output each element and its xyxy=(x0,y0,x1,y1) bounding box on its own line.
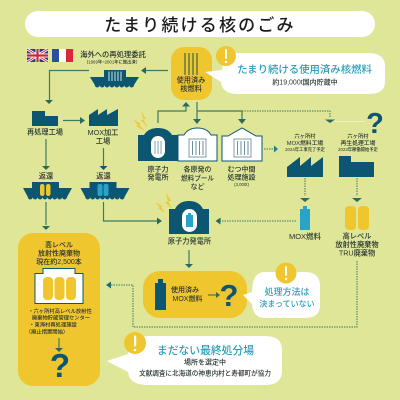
icon: France flag xyxy=(52,49,73,62)
overseas reprocessing label: 海外への再処理委託 xyxy=(80,50,147,59)
panel: high-level radioactive waste xyxy=(18,233,100,386)
arrow: dotted MOX fuel to power plant xyxy=(216,218,296,224)
panel: spent MOX fuel: MOX燃料 xyxy=(173,294,202,303)
icon: TRU waste capsules xyxy=(345,206,369,230)
title: たまり続ける核のごみ xyxy=(104,16,296,35)
icon: MOX fuel xyxy=(300,206,310,230)
panel: high-level radioactive waste: （廃止措置開始） xyxy=(26,328,68,336)
icon: MOX fabrication plant xyxy=(88,109,118,146)
label: TRU waste xyxy=(335,232,379,258)
arrow: to unknown xyxy=(58,338,60,348)
icon: on-site fuel pool xyxy=(178,128,217,191)
label: Rokkasho reprocessing plant: 六ヶ所村 xyxy=(347,132,369,140)
arrow: dotted to undecided xyxy=(242,111,365,123)
arrow: MOX ship to power plant xyxy=(104,202,162,224)
icon: MOX fabrication plant: 工場 xyxy=(96,136,110,146)
icon: Mutsu interim storage xyxy=(222,128,262,187)
icon: power plant with MOX xyxy=(169,201,209,234)
arrow: reprocessing to return ship xyxy=(42,139,50,170)
overseas reprocessing label: （1969年~2001年に搬出済） xyxy=(84,58,140,66)
arrow: fuel to overseas ship xyxy=(141,67,168,74)
arrow: MOX plant to return ship xyxy=(100,148,108,170)
icon: nuclear power plant xyxy=(138,128,178,182)
label: TRU waste: 放射性廃棄物 xyxy=(335,240,379,249)
icon: Mutsu interim storage: 処理施設 xyxy=(228,172,256,182)
icon: Rokkasho reprocessing plant xyxy=(339,156,374,177)
arrow: fuel to storage xyxy=(193,102,246,124)
label: MOX fuel: MOX燃料 xyxy=(289,231,322,241)
icon: overseas ship xyxy=(90,70,139,87)
icon: MOX fabrication plant: MOX加工 xyxy=(88,128,118,137)
icon: nuclear power plant: 発電所 xyxy=(148,172,168,182)
arrow: fuel to power plant xyxy=(158,102,190,123)
arrow: plant to spent MOX xyxy=(185,250,193,268)
panel: high-level radioactive waste: 高レベル xyxy=(45,240,73,249)
panel: spent nuclear fuel: 使用済み xyxy=(177,76,205,84)
panel: high-level radioactive waste: ・東海村再処理施設 xyxy=(29,320,78,328)
arrow: reprocessing to MOX plant xyxy=(63,117,85,124)
question mark: ? xyxy=(366,108,384,140)
icon: return ship with MOX xyxy=(80,182,130,199)
arrow: dotted to TRU waste xyxy=(352,178,362,202)
callout: no final disposal site xyxy=(107,332,282,385)
icon: reprocessing plant: 再処理工場 xyxy=(27,128,63,136)
label: return: 返還 xyxy=(96,172,111,180)
icon: nuclear power plant: 原子力 xyxy=(148,164,168,174)
label: Rokkasho MOX plant: 2024年工事完了予定 xyxy=(285,146,326,153)
panel: high-level radioactive waste: ・六ヶ所村高レベル放射性 xyxy=(28,307,92,315)
arrow: dotted to MOX fuel xyxy=(300,178,310,202)
overseas reprocessing label xyxy=(80,50,147,66)
icon: on-site fuel pool: 燃料プール xyxy=(181,174,214,182)
icon: waste cask xyxy=(35,268,83,304)
icon: return ship with waste xyxy=(23,182,72,199)
arrow xyxy=(208,294,216,296)
arrow: ship to high-level waste xyxy=(42,202,50,230)
label: Rokkasho MOX plant: 六ヶ所村 xyxy=(294,132,316,140)
panel: spent MOX fuel: 使用済み xyxy=(171,285,199,294)
icon: Mutsu interim storage: (3,000t) xyxy=(234,182,249,187)
label: Rokkasho reprocessing plant: 2023年稼働開始予定 xyxy=(338,146,379,153)
icon: lightning xyxy=(133,111,148,131)
panel: high-level radioactive waste: 現在約2,500本 xyxy=(36,257,82,266)
label: return: 返還 xyxy=(39,172,53,180)
callout: spent fuel keeps accumulating xyxy=(205,46,385,94)
panel: spent nuclear fuel: 核燃料 xyxy=(180,84,202,93)
panel: high-level radioactive waste: 放射性廃棄物 xyxy=(38,248,80,258)
callout: disposal method undecided: 決まっていない xyxy=(259,298,315,308)
label: Rokkasho MOX plant: MOX燃料工場 xyxy=(287,139,323,147)
callout: disposal method undecided: 処理方法は xyxy=(264,286,310,297)
panel: spent MOX fuel xyxy=(143,271,247,318)
title xyxy=(25,11,375,37)
icon: spent MOX rod xyxy=(155,279,166,310)
panel: spent nuclear fuel xyxy=(171,47,212,100)
callout: no final disposal site: 場所を選定中 xyxy=(184,358,226,366)
icon: fuel rods xyxy=(185,53,197,75)
label: TRU waste: 高レベル xyxy=(343,232,371,240)
callout: spent fuel keeps accumulating: 約19,000t国内貯蔵中 xyxy=(272,78,338,86)
icon: reprocessing plant xyxy=(27,111,63,136)
arrow: dotted to MOX plant xyxy=(264,146,278,152)
icon: UK flag xyxy=(27,49,48,62)
callout: no final disposal site: まだない最終処分場 xyxy=(157,343,254,357)
arrow: ship to reprocessing plant xyxy=(45,70,89,104)
panel: high-level radioactive waste: 廃棄物貯蔵管理センター xyxy=(32,314,90,322)
question mark: ? xyxy=(50,347,70,384)
label: Rokkasho MOX plant xyxy=(285,132,326,153)
icon: Mutsu interim storage: むつ中間 xyxy=(228,164,256,174)
callout: spent fuel keeps accumulating: たまり続ける使用済み核燃料 xyxy=(237,63,372,76)
callout: no final disposal site: 文献調査に北海道の神恵内村と寿都町が協力 xyxy=(139,368,271,378)
label: Rokkasho reprocessing plant xyxy=(338,132,379,153)
label: power plant: 原子力発電所 xyxy=(168,236,211,246)
icon: lightning xyxy=(155,193,172,213)
callout: disposal method undecided xyxy=(243,262,320,318)
label: TRU waste: TRU廃棄物 xyxy=(339,248,375,258)
icon: Rokkasho MOX factory xyxy=(287,157,323,177)
arrow: dotted TRU waste to high-level waste xyxy=(106,261,357,327)
question mark: ? xyxy=(220,278,238,313)
icon: on-site fuel pool: 各原発の xyxy=(184,164,212,174)
label: Rokkasho reprocessing plant: 再生処理工場 xyxy=(341,139,376,147)
icon: on-site fuel pool: など xyxy=(190,182,204,191)
